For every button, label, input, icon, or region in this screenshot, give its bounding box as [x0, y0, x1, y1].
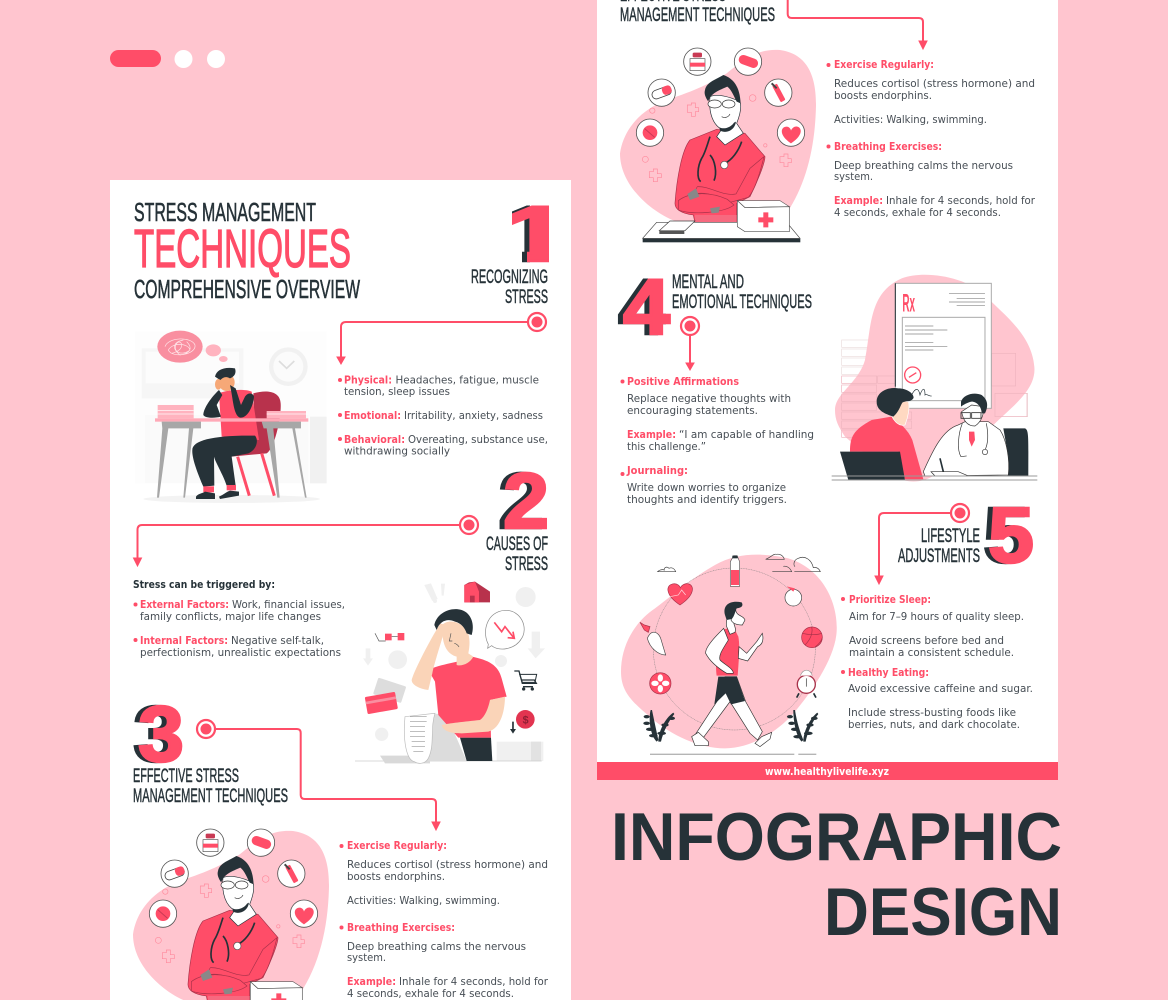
section 1 heading: RECOGNIZING — [471, 267, 548, 288]
main caption: INFOGRAPHIC — [611, 799, 1062, 875]
section 4 number: 4 — [618, 262, 665, 351]
text block: causes — [133, 578, 345, 659]
section 3 heading — [133, 766, 288, 807]
text block: stress signs: withdrawing socially — [344, 444, 450, 458]
text block: techniques: Inhale for 4 seconds, hold for — [399, 975, 548, 988]
text block: techniques repeated — [826, 58, 1035, 219]
text block: techniques repeated: Inhale for 4 seconds, hold for — [886, 194, 1035, 207]
section 2 heading: STRESS — [505, 554, 548, 575]
main caption — [611, 799, 1062, 950]
text block: techniques: Deep breathing calms the nervous — [347, 940, 526, 953]
text block: mental techniques — [620, 375, 814, 506]
text block: mental techniques: encouraging statements. — [627, 404, 758, 417]
text block: mental techniques: Positive Affirmations — [627, 375, 739, 388]
text block: techniques repeated: Activities: Walking, swimming. — [834, 113, 987, 126]
footer band — [597, 762, 1058, 780]
text block: mental techniques: “I am capable of handling — [679, 428, 814, 441]
text block: lifestyle adjustments: Healthy Eating: — [848, 666, 929, 679]
text block: stress signs: tension, sleep issues — [344, 385, 450, 398]
text block: lifestyle adjustments: Aim for 7–9 hours of quality sleep. — [849, 610, 1024, 623]
section 5 heading: ADJUSTMENTS — [898, 546, 980, 567]
section 1 heading — [471, 267, 548, 308]
text block: techniques repeated: Example: — [834, 194, 883, 207]
title: TECHNIQUES — [134, 219, 351, 279]
text block: causes: perfectionism, unrealistic expectations — [140, 646, 341, 659]
text block: techniques repeated: Deep breathing calms the nervous — [834, 159, 1013, 172]
section 2 number: 2 — [503, 456, 549, 545]
illustration: prescription and consultation: Rx — [902, 289, 915, 317]
text block: lifestyle adjustments — [841, 593, 1033, 731]
text block: lifestyle adjustments: Avoid excessive caffeine and sugar. — [848, 682, 1033, 695]
text block: techniques: boosts endorphins. — [347, 870, 445, 883]
text block: causes: External Factors: — [140, 598, 229, 611]
text block: causes: Work, financial issues, — [232, 598, 345, 611]
text block: techniques repeated: 4 seconds, exhale for 4 seconds. — [834, 206, 1001, 219]
panel: right page — [597, 0, 1058, 780]
illustration: worried man with receipt: $ — [523, 714, 529, 726]
text block: techniques: Reduces cortisol (stress hormone) and — [347, 858, 548, 871]
section 3 heading continued — [620, 0, 775, 26]
text block: techniques repeated: boosts endorphins. — [834, 89, 932, 102]
text block: mental techniques: Journaling: — [626, 464, 688, 477]
text block: techniques: Exercise Regularly: — [347, 839, 447, 852]
text block: stress signs — [338, 374, 548, 458]
illustration: stressed man at desk — [135, 331, 327, 503]
arrow: section 3 connector continued — [788, 0, 927, 49]
section 3 number: 3 — [138, 689, 184, 778]
arrow: section 4 connector — [681, 317, 699, 370]
section 3 heading: EFFECTIVE STRESS — [133, 766, 239, 787]
text block: stress signs: Behavioral: — [344, 433, 405, 446]
text block: causes: Negative self-talk, — [231, 634, 324, 647]
section 5 number: 5 — [988, 490, 1034, 579]
text block: stress signs: Headaches, fatigue, muscle — [396, 374, 539, 386]
text block: stress signs: Overeating, substance use, — [408, 433, 548, 446]
section 4 heading: MENTAL AND — [672, 272, 744, 293]
text block: techniques — [340, 839, 548, 1000]
section 5 heading — [898, 526, 980, 567]
section 1 heading: STRESS — [505, 287, 548, 308]
text block: mental techniques: thoughts and identify triggers. — [627, 493, 787, 506]
section 1 number — [512, 206, 549, 262]
section 4 heading: EMOTIONAL TECHNIQUES — [672, 292, 812, 313]
text block: mental techniques: Replace negative thoughts with — [627, 392, 791, 405]
text block: techniques: 4 seconds, exhale for 4 seconds. — [347, 987, 514, 1000]
text block: techniques repeated: Breathing Exercises: — [834, 140, 942, 153]
arrow: section 3 connector — [197, 720, 440, 830]
text block: stress signs: Emotional: — [344, 409, 401, 422]
section 1 number: 1 — [497, 189, 567, 278]
illustration: walking man with health icons — [621, 554, 837, 754]
text block: lifestyle adjustments: Avoid screens before bed and — [849, 634, 1004, 647]
title — [134, 197, 360, 304]
illustration: worried man with receipt — [355, 582, 545, 763]
title: COMPREHENSIVE OVERVIEW — [134, 274, 360, 304]
text block: lifestyle adjustments: Prioritize Sleep: — [849, 593, 931, 606]
section 2 heading — [486, 534, 548, 575]
section 4 number: 4 — [623, 262, 670, 351]
section 3 number: 3 — [133, 689, 179, 778]
text block: techniques: system. — [347, 951, 386, 964]
arrow: section 2 connector — [134, 516, 478, 566]
illustration: prescription and consultation — [832, 275, 1037, 481]
section 5 number: 5 — [983, 490, 1029, 579]
text block: techniques: Activities: Walking, swimming. — [347, 894, 500, 907]
illustration: doctor with medical icons repeated — [620, 48, 816, 242]
text block: causes: family conflicts, major life changes — [140, 610, 321, 623]
section 4 heading — [672, 272, 812, 313]
main caption: DESIGN — [824, 874, 1062, 950]
text block: techniques: Breathing Exercises: — [347, 921, 455, 934]
text block: lifestyle adjustments: Include stress-busting foods like — [848, 706, 1016, 719]
illustration: doctor with medical icons — [133, 829, 329, 1000]
text block: mental techniques: this challenge.” — [627, 440, 706, 453]
text block: causes: Stress can be triggered by: — [133, 578, 275, 591]
section 1 number: 1 — [502, 189, 572, 278]
text block: techniques: Example: — [347, 975, 396, 988]
panel: left page — [110, 180, 572, 1000]
text block: techniques repeated: Exercise Regularly: — [834, 58, 934, 71]
section 5 heading: LIFESTYLE — [921, 526, 980, 547]
text block: techniques repeated: Reduces cortisol (stress hormone) and — [834, 77, 1035, 90]
pagination dots — [110, 50, 225, 68]
text block: stress signs: Physical: — [344, 374, 392, 386]
section 3 heading: MANAGEMENT TECHNIQUES — [133, 786, 288, 807]
title: STRESS MANAGEMENT — [134, 197, 316, 227]
text block: techniques repeated: system. — [834, 170, 873, 183]
section 2 number: 2 — [498, 456, 544, 545]
text block: causes: Internal Factors: — [140, 634, 228, 647]
text block: lifestyle adjustments: maintain a consistent schedule. — [849, 646, 1014, 659]
arrow: section 5 connector — [875, 504, 969, 584]
section 2 heading: CAUSES OF — [486, 534, 548, 555]
footer band: www.healthylivelife.xyz — [765, 766, 889, 778]
text block: lifestyle adjustments: berries, nuts, and dark chocolate. — [848, 718, 1020, 731]
arrow: section 1 connector — [337, 313, 546, 364]
text block: stress signs: Irritability, anxiety, sadness — [404, 409, 543, 422]
section 3 heading continued: MANAGEMENT TECHNIQUES — [620, 5, 775, 26]
text block: mental techniques: Example: — [627, 428, 676, 441]
text block: mental techniques: Write down worries to organize — [627, 481, 786, 494]
